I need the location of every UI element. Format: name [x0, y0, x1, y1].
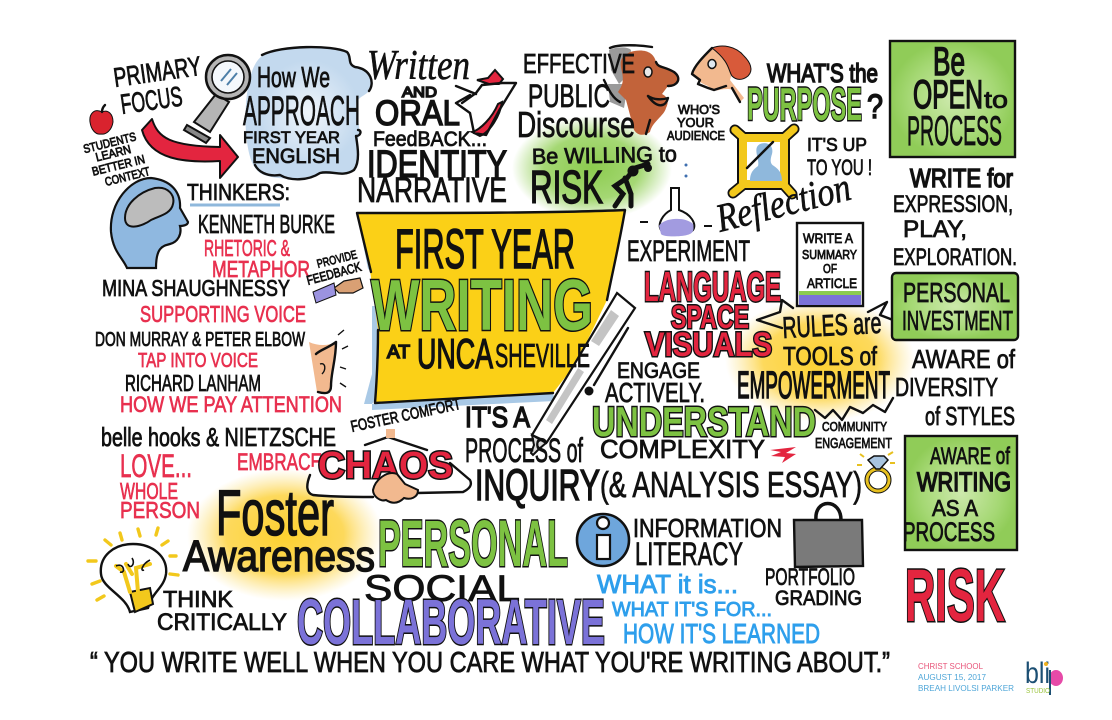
credits: BREAH LIVOLSI PARKER [918, 683, 1014, 693]
names and notes: EMBRACE [237, 449, 322, 476]
foster awareness: Awareness [183, 532, 375, 581]
names and notes: RHETORIC & [204, 235, 290, 261]
names and notes: DON MURRAY & PETER ELBOW [95, 329, 305, 351]
language space visuals: LANGUAGE [644, 263, 781, 310]
names and notes: HOW WE PAY ATTENTION [120, 392, 342, 417]
foster comfort: FOSTER COMFORT [349, 396, 463, 436]
what it is notes: HOW IT'S LEARNED [623, 618, 820, 649]
icon: lightbulb [88, 528, 178, 612]
yellow glow behind rules [725, 298, 915, 422]
rules are tools of empowerment: TOOLS of [783, 341, 878, 371]
what's the purpose: PURPOSE [747, 78, 862, 130]
names and notes: SUPPORTING VOICE [140, 301, 306, 327]
panel: aware of writing: PROCESS [903, 517, 995, 547]
thinkers heading: THINKERS: [187, 179, 290, 205]
think critically [157, 586, 287, 636]
provide feedback: FEEDBACK [305, 259, 363, 288]
portfolio grading: PORTFOLIO [765, 564, 855, 591]
it's up to you [807, 135, 872, 180]
community engagement [815, 419, 892, 452]
risk: RISK [905, 554, 1005, 637]
what's the purpose: ? [867, 88, 883, 126]
aware of diversity [895, 344, 1016, 431]
credits: CHRIST SCHOOL [918, 661, 983, 671]
it's a process of inquiry: (& ANALYSIS ESSAY) [600, 464, 862, 505]
effective public discourse [517, 48, 635, 145]
names and notes: WHOLE [120, 478, 178, 504]
panel: personal investment: INVESTMENT [902, 305, 1013, 336]
central title panel [357, 210, 635, 455]
it's up to you: TO YOU ! [807, 155, 872, 180]
students learn note: BETTER IN [91, 152, 146, 179]
icon: book summary: SUMMARY [802, 247, 857, 262]
engage actively: ENGAGE [617, 358, 700, 383]
panel: be open to process [890, 40, 1015, 157]
understand complexity: COMPLEXITY [600, 434, 765, 464]
primary focus note [112, 51, 203, 120]
chaos figure: CHAOS [318, 445, 453, 487]
foster awareness: Foster [216, 477, 334, 549]
engage actively: ACTIVELY. [605, 377, 705, 408]
reflection: Reflection [710, 164, 855, 241]
it's a process of inquiry: IT'S A [465, 402, 531, 434]
language space visuals: VISUALS [645, 326, 772, 364]
social: SOCIAL [364, 568, 520, 609]
it's up to you: IT'S UP [807, 135, 867, 155]
icon: stick figure [615, 164, 688, 206]
icon: brown face in profile [604, 45, 678, 135]
students learn note: LEARN [94, 142, 132, 164]
who's your audience: AUDIENCE [667, 128, 725, 143]
panel: aware of writing: WRITING [917, 467, 1011, 497]
students learn note [82, 128, 152, 192]
icon: book summary: OF [823, 261, 837, 276]
what it is notes: WHAT it is... [597, 569, 738, 599]
effective public discourse: Discourse [517, 104, 635, 145]
title text: SHEVILLE [495, 337, 590, 374]
names and notes [95, 209, 342, 523]
icon: information [577, 514, 629, 566]
written and oral feedback: Written [367, 43, 470, 89]
engage actively [605, 358, 705, 408]
primary focus note: PRIMARY [112, 51, 203, 93]
aware of diversity: DIVERSITY [895, 372, 998, 402]
icon: book summary: WRITE A [803, 230, 854, 246]
written and oral feedback: FeedBACK... [373, 128, 487, 151]
written and oral feedback: NARRATIVE [357, 171, 507, 210]
title text: WRITING [371, 266, 593, 346]
portfolio grading: GRADING [775, 587, 862, 610]
be willing to risk: Be WILLING to [532, 141, 677, 169]
collaborative: COLLABORATIVE [297, 586, 605, 658]
title text: FIRST YEAR [395, 217, 575, 280]
arrow: red curved [142, 119, 238, 178]
names and notes: METAPHOR [212, 256, 310, 282]
names and notes: TAP INTO VOICE [138, 350, 258, 372]
icon: hand [313, 278, 363, 303]
icon: flask [640, 188, 712, 236]
logo: blip studio: STUDIO [1026, 688, 1050, 695]
icon: pen [531, 293, 635, 455]
language space visuals: SPACE [671, 299, 749, 335]
it's a process of inquiry [465, 402, 862, 510]
how we approach text [243, 62, 360, 168]
names and notes: MINA SHAUGHNESSY [102, 275, 290, 301]
rules are tools of empowerment [737, 300, 893, 420]
names and notes: PERSON [120, 497, 200, 523]
how we approach text: ENGLISH [252, 145, 340, 168]
title text: AT [387, 342, 410, 362]
what's the purpose [747, 58, 883, 130]
personal: PERSONAL [378, 506, 568, 580]
write for expression: PLAY, [903, 216, 967, 243]
logo: blip studio: bli [1025, 657, 1050, 690]
write for expression: EXPRESSION, [893, 191, 1013, 218]
provide feedback [305, 247, 363, 288]
written and oral feedback: AND [402, 84, 437, 101]
icon: head with brain [111, 178, 188, 268]
provide feedback: PROVIDE [315, 247, 359, 271]
icon: briefcase [794, 504, 863, 567]
names and notes: KENNETH BURKE [198, 209, 335, 239]
panel: personal investment [892, 273, 1018, 340]
experiment: EXPERIMENT [627, 235, 750, 268]
who's your audience [667, 102, 725, 143]
credits: AUGUST 15, 2017 [918, 672, 986, 682]
language space visuals [644, 263, 781, 364]
names and notes: RICHARD LANHAM [125, 370, 261, 396]
write for expression [893, 163, 1017, 271]
effective public discourse: EFFECTIVE [523, 48, 635, 79]
information literacy: LITERACY [635, 536, 743, 572]
green glow behind risk [512, 116, 672, 220]
community engagement: ENGAGEMENT [815, 435, 892, 452]
students learn note: STUDENTS [82, 129, 138, 156]
cloud: how we approach: APPROACH [243, 87, 360, 134]
icon: book summary: ARTICLE [807, 275, 857, 291]
icon: ear [309, 330, 348, 394]
logo: blip studio [1025, 657, 1063, 695]
aware of diversity: AWARE of [912, 344, 1016, 374]
what it is notes [597, 569, 820, 649]
names and notes: LOVE... [120, 448, 192, 484]
write for expression: EXPLORATION. [893, 244, 1017, 271]
how we approach text: FIRST YEAR [243, 128, 340, 147]
panel: personal investment: PERSONAL [903, 277, 1010, 308]
rules are tools of empowerment: RULES are [782, 307, 882, 345]
title text [371, 217, 593, 377]
left thinkers column [95, 178, 342, 523]
primary focus note: FOCUS [119, 81, 184, 120]
icon: peach face in profile [692, 46, 751, 102]
icon: apple [90, 105, 113, 134]
panel: be open to process: to [984, 87, 1008, 114]
what it is notes: WHAT IT'S FOR... [612, 599, 772, 621]
panel: aware of writing: AS A [932, 495, 979, 521]
community engagement: COMMUNITY [822, 419, 887, 434]
yellow glow behind foster [187, 469, 383, 601]
written and oral feedback: IDENTITY [367, 144, 507, 186]
what's the purpose: WHAT'S the [767, 58, 878, 88]
panel: be open to process: OPEN [913, 73, 983, 117]
think critically: THINK [163, 586, 234, 612]
information literacy: INFORMATION [633, 513, 782, 543]
panel: aware of writing [903, 436, 1017, 550]
how we approach text: How We [257, 62, 330, 94]
icon: ring [857, 452, 895, 491]
students learn note: CONTEXT [103, 164, 152, 189]
written and oral feedback: ORAL [375, 94, 460, 133]
cloud: how we approach [243, 47, 372, 179]
icon: picture frame [733, 129, 794, 194]
effective public discourse: PUBLIC [528, 78, 610, 114]
icon: book summary [797, 223, 863, 306]
icon: open mouth [456, 70, 516, 136]
be willing to risk [530, 141, 677, 213]
quote: “ YOU WRITE WELL WHEN YOU CARE WHAT YOU'RE WRITING ABOUT.” [90, 647, 890, 679]
understand complexity [592, 398, 816, 464]
written and oral feedback [357, 43, 507, 210]
panel: be open to process: PROCESS [907, 107, 1002, 154]
be willing to risk: RISK [530, 161, 603, 213]
names and notes: belle hooks & NIETZSCHE [101, 422, 336, 452]
panel: aware of writing: AWARE of [930, 443, 1010, 470]
portfolio grading [765, 564, 862, 610]
panel: be open to process: Be [933, 40, 965, 84]
icon: magnifying glass [184, 55, 250, 143]
aware of diversity: of STYLES [925, 401, 1015, 431]
rules are tools of empowerment: EMPOWERMENT [737, 365, 890, 407]
information literacy [633, 513, 782, 572]
it's a process of inquiry: INQUIRY [475, 461, 600, 510]
think critically: CRITICALLY [157, 609, 287, 636]
who's your audience: WHO'S [678, 102, 720, 117]
foster awareness [183, 477, 375, 581]
who's your audience: YOUR [677, 115, 714, 130]
understand complexity: UNDERSTAND [592, 398, 816, 445]
write for expression: WRITE for [910, 163, 1013, 193]
credits [918, 661, 1014, 693]
title text: UNCA [417, 330, 493, 377]
it's a process of inquiry: PROCESS of [465, 432, 583, 470]
chaos figure [307, 429, 471, 503]
